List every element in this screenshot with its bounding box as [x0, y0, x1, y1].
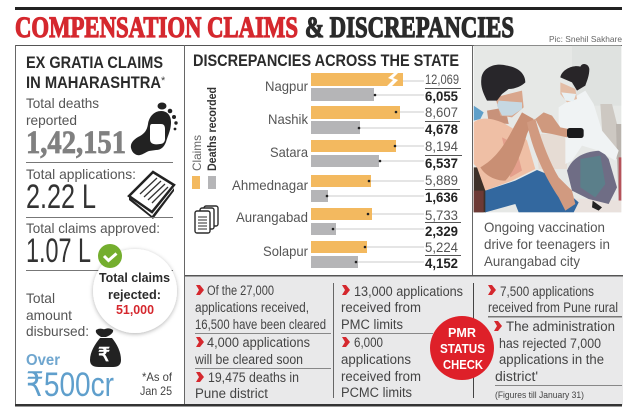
callout: total claims rejected: 51,000 [116, 302, 154, 317]
heading: ex gratia: IN MAHARASHTRA [26, 73, 161, 92]
total amount disbursed: Total [26, 290, 55, 306]
photo caption: Aurangabad city [484, 253, 580, 269]
row: Satara [270, 138, 462, 171]
legend: Claims [190, 135, 204, 171]
status panel background [185, 276, 623, 405]
total applications: Total applications: [26, 166, 136, 182]
row: Satara: 6,537 [425, 155, 458, 171]
row: Nagpur: 6,055 [425, 88, 458, 104]
total deaths: Total deaths [26, 95, 99, 111]
total deaths: reported [26, 112, 77, 128]
title: COMPENSATION CLAIMS [15, 11, 298, 44]
badge: PMR status check: CHECK [443, 357, 484, 372]
panel: discrepancies across the state [190, 51, 462, 271]
column 2 notes: 6,000 [354, 335, 383, 350]
over 500 crore [26, 352, 114, 404]
column 3 notes: 7,500 applications [500, 284, 594, 299]
callout: total claims rejected [93, 249, 177, 333]
row: Aurangabad [236, 207, 461, 239]
row: Nashik [268, 104, 460, 137]
over 500 crore: ₹500cr [26, 366, 114, 404]
badge: PMR status check [430, 316, 494, 380]
row: Ahmednagar [232, 172, 460, 205]
column 1 notes: applications received, [195, 300, 309, 315]
row: Aurangabad: Aurangabad [236, 209, 308, 225]
column 3 notes [488, 284, 622, 400]
column 1 notes: 4,000 applications [207, 335, 310, 350]
row: Satara: Satara [270, 144, 308, 160]
row: Nagpur: 12,069 [425, 71, 459, 87]
row: Ahmednagar: 1,636 [425, 189, 458, 205]
column 3 notes: has rejected 7,000 [499, 336, 601, 351]
row: Ahmednagar: 5,889 [425, 172, 458, 188]
row: Nashik: Nashik [268, 111, 309, 127]
total applications [26, 166, 136, 216]
row: Satara: 8,194 [425, 138, 458, 154]
column 2 notes: received from [341, 369, 421, 384]
legend [190, 87, 219, 189]
row: Nagpur [265, 71, 461, 104]
column 3 notes: (Figures till January 31) [495, 390, 584, 400]
title: & DISCREPANCIES [305, 11, 514, 44]
row: Solapur: 5,224 [425, 239, 458, 255]
total amount disbursed: amount [26, 307, 72, 323]
row: Aurangabad: 5,733 [425, 207, 458, 223]
row: Aurangabad: 2,329 [425, 223, 458, 239]
column 2 notes: PCMC limits [341, 385, 412, 400]
heading: discrepancies: DISCREPANCIES ACROSS THE STATE [193, 51, 459, 70]
callout: total claims rejected: rejected: [108, 287, 161, 302]
column 2 notes: received from [341, 300, 421, 315]
column 2 notes: 13,000 applications [354, 284, 463, 299]
icon: money bag: ₹ [98, 345, 110, 366]
row: Nagpur: Nagpur [265, 78, 308, 94]
column 3 notes: received from Pune rural [488, 300, 618, 315]
row: Ahmednagar: Ahmednagar [232, 177, 308, 193]
footnote: as of jan 25: *As of [142, 370, 173, 384]
footnote: as of jan 25 [140, 370, 173, 398]
column 2 notes: applications [341, 352, 411, 367]
row: Nashik: 8,607 [425, 104, 458, 120]
panel: ex gratia claims [26, 53, 178, 404]
icon: green check [98, 244, 122, 268]
row: Solapur: Solapur [263, 243, 308, 259]
heading: ex gratia: * [161, 75, 166, 87]
column 3 notes: district' [495, 369, 538, 384]
total deaths: 1,42,151 [26, 125, 126, 161]
column 1 notes: Of the 27,000 [207, 283, 274, 298]
photo caption: Ongoing vaccination [484, 219, 605, 235]
row: Nashik: 4,678 [425, 121, 458, 137]
row: Solapur [263, 239, 461, 271]
icon: document sheets [129, 172, 174, 219]
column 1 notes [194, 283, 331, 401]
heading: ex gratia [26, 53, 166, 92]
column 3 notes: applications in the [499, 352, 604, 367]
icon: document stack [195, 206, 218, 233]
over 500 crore: Over [26, 352, 60, 369]
footnote: as of jan 25: Jan 25 [140, 384, 172, 398]
total deaths [26, 95, 126, 161]
row: Solapur: 4,152 [425, 255, 458, 271]
heading: ex gratia: EX GRATIA CLAIMS [26, 53, 163, 72]
total claims approved: Total claims approved: [26, 220, 160, 236]
column 1 notes: Pune district [195, 386, 268, 401]
column 1 notes: will be cleared soon [194, 352, 303, 367]
column 1 notes: 16,500 have been cleared [195, 317, 326, 332]
photo: vaccination drive [472, 44, 624, 214]
total amount disbursed [26, 290, 89, 339]
column 3 notes: The administration [506, 319, 615, 334]
total applications: 2.22 L [26, 178, 96, 216]
photo credit: Pic: Snehil Sakhare [549, 34, 622, 44]
photo caption: drive for teenagers in [484, 236, 610, 252]
badge: PMR status check: PMR [448, 325, 477, 340]
total claims approved [26, 220, 160, 270]
total claims approved: 1.07 L [26, 232, 91, 270]
badge: PMR status check: STATUS [440, 341, 485, 356]
callout: total claims rejected: Total claims [99, 270, 170, 285]
icon: money bag [90, 328, 121, 367]
bar chart [232, 71, 462, 271]
column 2 notes: PMC limits [341, 317, 403, 332]
icon: footprint [131, 102, 178, 155]
column 1 notes: 19,475 deaths in [208, 370, 299, 385]
photo caption [484, 219, 610, 269]
legend: Deaths recorded [205, 87, 219, 171]
column 2 notes [341, 284, 463, 400]
total amount disbursed: disbursed: [26, 323, 89, 339]
panel: PMR status check [194, 283, 622, 401]
